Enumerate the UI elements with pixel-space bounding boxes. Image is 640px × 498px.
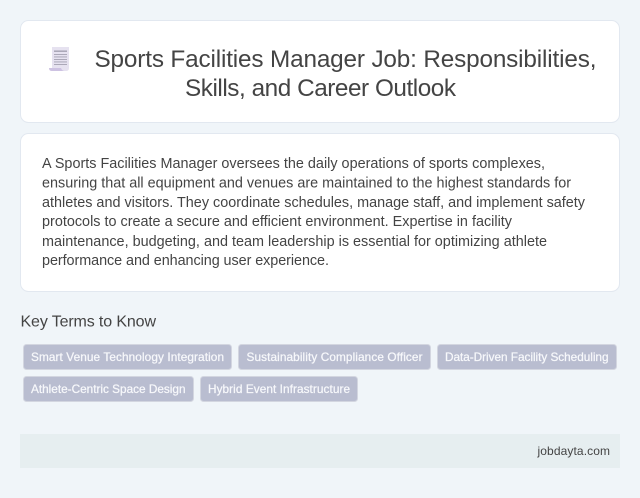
tag: hybrid event: Hybrid Event Infrastructure — [208, 382, 350, 396]
tag: sustainability: Sustainability Compliance Officer — [246, 350, 423, 364]
tag: sustainability — [238, 344, 430, 370]
footer source text: jobdayta.com — [536, 444, 610, 458]
text block: description: ensuring that all equipment and venues are maintained to the highest standards for — [42, 175, 571, 191]
text block: description: athletes and visitors. They coordinate schedules, manage staff, and implement safety — [42, 195, 586, 211]
text block: description: performance and enhancing user experience. — [42, 253, 329, 269]
tag: athlete-centric: Athlete-Centric Space Design — [31, 382, 186, 396]
text block: description: maintenance, budgeting, and team leadership is essential for optimizing athlete — [42, 234, 547, 250]
tag: data-driven: Data-Driven Facility Scheduling — [445, 350, 608, 364]
icon: document scroll — [49, 47, 69, 71]
title — [94, 46, 596, 102]
title: Sports Facilities Manager Job: Responsibilities, — [94, 46, 596, 73]
text block: description — [42, 156, 586, 269]
panel: description — [20, 134, 620, 292]
tag: smart venue — [24, 344, 232, 370]
tag: smart venue: Smart Venue Technology Integration — [31, 350, 224, 364]
text block: description: protocols to create a secure and efficient environment. Expertise in facility — [42, 214, 513, 230]
text block: description: A Sports Facilities Manager oversees the daily operations of sports complexes, — [42, 156, 545, 172]
tag: hybrid event — [200, 376, 358, 402]
title: Skills, and Career Outlook — [185, 75, 457, 102]
heading: key terms: Key Terms to Know — [20, 314, 156, 330]
panel: header — [20, 20, 620, 122]
tag list — [24, 344, 616, 402]
tag: athlete-centric — [24, 376, 194, 402]
footer — [20, 434, 620, 468]
tag: data-driven — [438, 344, 616, 370]
